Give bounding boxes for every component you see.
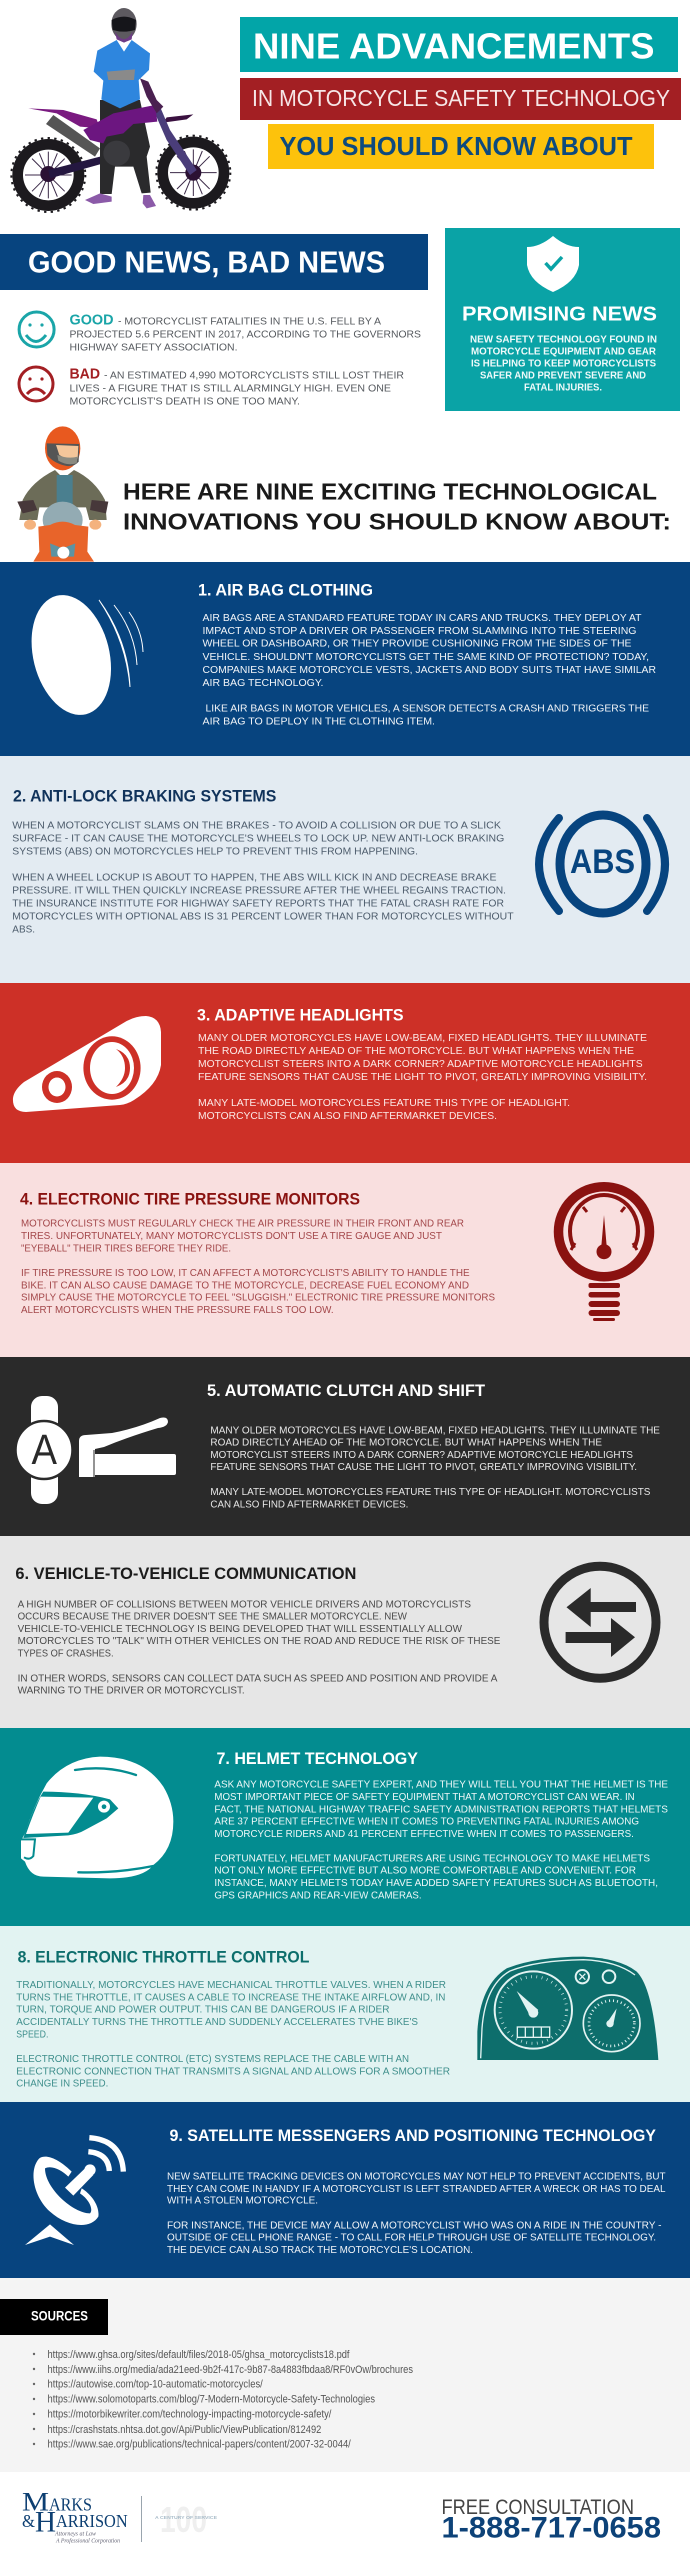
heading: 3 adaptive headlights: 3. ADAPTIVE HEADLIGHTS [197,1005,404,1024]
heading: good news, bad news: GOOD NEWS, BAD NEWS [28,246,385,280]
panel: 5 automatic clutch and shift [0,1357,690,1536]
text: satellite body: OUTSIDE OF CELL PHONE RANGE - TO CALL FOR HELP THROUGH USE OF SATELLITE TECHNOLOGY. [167,2233,656,2244]
text: bad news: - AN ESTIMATED 4,990 MOTORCYCLISTS STILL LOST THEIR [104,371,404,382]
text: clutch body: MOTORCYCLIST STEERS INTO A DARK CORNER? ADAPTIVE MOTORCYCLE HEADLIGHTS [210,1450,633,1461]
logo: Marks & Harrison: ARRISON [56,2511,128,2531]
title banner: nine advancements: NINE ADVANCEMENTS [253,26,654,67]
text: good news: HIGHWAY SAFETY ASSOCIATION. [70,342,238,353]
text: throttle body: CHANGE IN SPEED. [16,2079,108,2090]
text: air bag body: AIR BAG TO DEPLOY IN THE CLOTHING ITEM. [202,717,435,728]
title banner: nine advancements [240,17,678,72]
icon: clutch lever with A symbol: A [32,1426,57,1474]
text: air bag body [202,613,656,728]
panel: 3 adaptive headlights [0,983,690,1163]
logo: Marks & Harrison: A Professional Corporation [55,2537,120,2544]
icon: headlight [13,1016,161,1112]
text: anti-lock braking body: WHEN A MOTORCYCLIST SLAMS ON THE BRAKES - TO AVOID A COLLISION OR DUE TO A SLICK [12,821,501,832]
heading: 2 anti-lock braking systems: 2. ANTI-LOCK BRAKING SYSTEMS [13,787,276,806]
text: adaptive headlights body: MOTORCYCLISTS CAN ALSO FIND AFTERMARKET DEVICES. [198,1111,497,1122]
text: throttle body: TURNS THE THROTTLE, IT CAUSES A CABLE TO INCREASE THE INTAKE AIRFLOW AND, IN [16,1992,445,2003]
title banner: you should know about [268,124,654,169]
text: tire pressure body: ALERT MOTORCYCLISTS WHEN THE PRESSURE FALLS TOO LOW. [21,1305,334,1316]
text: throttle body [16,1980,450,2090]
text: satellite body: WITH A STOLEN MOTORCYCLE. [167,2196,318,2207]
icon: sad face [19,367,53,401]
title banner: in motorcycle safety technology [240,78,681,120]
text: tire pressure body: MOTORCYCLISTS MUST REGULARLY CHECK THE AIR PRESSURE IN THEIR FRONT AND REAR [21,1219,464,1230]
contact: free consultation phone number [442,2496,661,2545]
icon: two-way arrows [544,1566,656,1678]
logo: a century of service: A CENTURY OF SERVICE [155,2515,217,2520]
heading: 5 automatic clutch and shift: 5. AUTOMATIC CLUTCH AND SHIFT [207,1381,486,1400]
text: clutch body: MANY LATE-MODEL MOTORCYCLES FEATURE THIS TYPE OF HEADLIGHT. MOTORCYCLISTS [210,1487,651,1498]
heading: 1 air bag clothing: 1. AIR BAG CLOTHING [198,581,373,600]
text: bad news [70,367,404,408]
text: adaptive headlights body: MANY LATE-MODEL MOTORCYCLES FEATURE THIS TYPE OF HEADLIGHT. [198,1098,570,1109]
illustration: rider standing with dirt bike [11,8,230,212]
text: good news: PROJECTED 5.6 PERCENT IN 2017, ACCORDING TO THE GOVERNORS [70,329,421,340]
logo: Marks & Harrison: & [22,2511,35,2531]
heading: 7 helmet technology: 7. HELMET TECHNOLOGY [216,1749,419,1768]
icon: smiling face [19,312,54,347]
text: vehicle-to-vehicle body: TYPES OF CRASHES. [18,1648,114,1659]
text: promising news body: FATAL INJURIES. [524,382,602,393]
text: helmet body: GPS GRAPHICS AND REAR-VIEW CAMERAS. [214,1890,422,1901]
panel: 2 anti-lock braking systems [0,756,690,983]
text: throttle body: ELECTRONIC CONNECTION THAT TRANSMITS A SIGNAL AND ALLOWS FOR A SMOOTHER [16,2066,450,2077]
heading: 8 electronic throttle control: 8. ELECTRONIC THROTTLE CONTROL [18,1948,309,1967]
logo: Marks & Harrison [22,2488,142,2544]
text: throttle body: ELECTRONIC THROTTLE CONTROL (ETC) SYSTEMS REPLACE THE CABLE WITH AN [16,2054,409,2065]
text: helmet body [214,1780,668,1901]
heading: good news, bad news [0,234,428,290]
text: adaptive headlights body: MOTORCYCLIST STEERS INTO A DARK CORNER? ADAPTIVE MOTORCYCLE HEADLIGHTS [198,1059,643,1070]
text: bad news: LIVES - A FIGURE THAT IS STILL ALARMINGLY HIGH. EVEN ONE [70,384,391,395]
text: throttle body: ACCIDENTALLY TURNS THE THROTTLE AND SUDDENLY ACCELERATES TVHE BIKE'S [16,2017,418,2028]
icon: shield with check [527,236,579,292]
text: anti-lock braking body: ABS. [12,924,35,935]
text: satellite body: FOR INSTANCE, THE DEVICE MAY ALLOW A MOTORCYCLIST WHO WAS ON A RIDE IN THE COUNTRY - [167,2220,662,2231]
text: air bag body: AIR BAGS ARE A STANDARD FEATURE TODAY IN CARS AND TRUCKS. THEY DEPLOY AT [202,613,642,624]
text: helmet body: FACT, THE NATIONAL HIGHWAY TRAFFIC SAFETY ADMINISTRATION REPORTS THAT HELMETS [214,1804,668,1815]
text: helmet body: ARE 37 PERCENT EFFECTIVE WHEN IT COMES TO PREVENTING FATAL INJURIES AMONG [214,1817,639,1828]
text: vehicle-to-vehicle body: VEHICLE-TO-VEHICLE TECHNOLOGY IS BEING DEVELOPED THAT WILL ESSENTIALLY ALLOW [18,1624,462,1635]
text: bad news: BAD [70,367,100,383]
text: tire pressure body: BIKE. IT CAN ALSO CAUSE DAMAGE TO THE MOTORCYCLE, DECREASE FUEL ECONOMY AND [21,1280,469,1291]
text: vehicle-to-vehicle body: A HIGH NUMBER OF COLLISIONS BETWEEN MOTOR VEHICLE DRIVERS AND MOTORCYCLISTS [18,1599,471,1610]
text: throttle body: TURN, TORQUE AND POWER OUTPUT. THIS CAN BE DANGEROUS IF A RIDER [16,2005,390,2016]
text: anti-lock braking body: SURFACE - IT CAN CAUSE THE MOTORCYCLE'S WHEELS TO LOCK UP. NEW ANTI-LOCK BRAKING [12,834,504,845]
icon: ABS warning light [539,815,665,913]
text: promising news body [470,334,657,393]
panel: 8 electronic throttle control [0,1926,690,2102]
text: promising news body: IS HELPING TO KEEP MOTORCYCLISTS [471,358,656,369]
text: satellite body: THE DEVICE CAN ALSO TRACK THE MOTORCYCLE'S LOCATION. [167,2245,473,2256]
text: anti-lock braking body: WHEN A WHEEL LOCKUP IS ABOUT TO HAPPEN, THE ABS WILL KICK IN AND DECREASE BRAKE [12,872,497,883]
list: source links: https://crashstats.nhtsa.dot.gov/Api/Public/ViewPublication/812492 [48,2424,321,2436]
text: adaptive headlights body: FEATURE SENSORS THAT CAUSE THE LIGHT TO PIVOT, GREATLY IMPROVING VISIBILITY. [198,1072,647,1083]
text: satellite body: NEW SATELLITE TRACKING DEVICES ON MOTORCYCLES MAY NOT HELP TO PREVENT ACCIDENTS, BUT [167,2171,666,2182]
text: throttle body: SPEED. [16,2029,48,2040]
logo: Marks & Harrison: M [22,2488,49,2517]
text: air bag body: LIKE AIR BAGS IN MOTOR VEHICLES, A SENSOR DETECTS A CRASH AND TRIGGERS THE [206,704,649,715]
list: source links: https://www.ghsa.org/sites/default/files/2018-05/ghsa_motorcyclists18.pdf [48,2349,350,2361]
text: anti-lock braking body: THE INSURANCE INSTITUTE FOR HIGHWAY SAFETY REPORTS THAT THE FATAL CRASH RATE FOR [12,898,504,909]
text: air bag body: COMPANIES MAKE MOTORCYCLE VESTS, JACKETS AND BODY SUITS THAT HAVE SIMILAR [202,665,656,676]
panel: 7 helmet technology [0,1728,690,1926]
text: vehicle-to-vehicle body: MOTORCYCLES TO "TALK" WITH OTHER VEHICLES ON THE ROAD AND REDUCE THE RISK OF THESE [18,1636,501,1647]
text: air bag body: VEHICLE. SHOULDN'T MOTORCYCLISTS GET THE SAME KIND OF PROTECTION? TODAY, [202,652,649,663]
panel: 6 vehicle-to-vehicle communication [0,1536,690,1728]
text: clutch body: CAN ALSO FIND AFTERMARKET DEVICES. [210,1499,408,1510]
text: anti-lock braking body: PRESSURE. IT WILL THEN QUICKLY INCREASE PRESSURE AFTER THE WHEEL REGAINS TRACTION. [12,885,506,896]
panel: 4 electronic tire pressure monitors [0,1163,690,1357]
text: promising news body: SAFER AND PREVENT SEVERE AND [480,370,646,381]
text: clutch body: MANY OLDER MOTORCYCLES HAVE LOW-BEAM, FIXED HEADLIGHTS. THEY ILLUMINATE THE [210,1425,660,1436]
text: satellite body: THEY CAN COME IN HANDY IF A MOTORCYCLIST IS LEFT STRANDED AFTER A WRECK OR HAS TO DEAL [167,2184,666,2195]
panel: 1 air bag clothing [0,562,690,756]
text: promising news body: MOTORCYCLE EQUIPMENT AND GEAR [471,346,657,357]
text: clutch body: FEATURE SENSORS THAT CAUSE THE LIGHT TO PIVOT, GREATLY IMPROVING VISIBILITY. [210,1462,637,1473]
icon: helmet [21,1757,173,1878]
heading: sources: SOURCES [31,2309,88,2324]
list: source links: https://www.iihs.org/media/ada21eed-9b2f-417c-9b87-8a4883fbdaa8/RF0vOw/brochures [48,2364,413,2376]
text: adaptive headlights body: MANY OLDER MOTORCYCLES HAVE LOW-BEAM, FIXED HEADLIGHTS. THEY ILLUMINATE [198,1033,647,1044]
text: throttle body: TRADITIONALLY, MOTORCYCLES HAVE MECHANICAL THROTTLE VALVES. WHEN A RIDER [16,1980,446,1991]
text: tire pressure body: SIMPLY CAUSE THE MOTORCYCLE TO FEEL "SLUGGISH." ELECTRONIC TIRE PRESSURE MONITORS [21,1293,495,1304]
heading: promising news: PROMISING NEWS [462,304,657,326]
text: good news [70,312,421,353]
text: helmet body: INSTANCE, MANY HELMETS TODAY HAVE ADDED SAFETY FEATURES SUCH AS BLUETOOTH, [214,1878,658,1889]
text: clutch body: ROAD DIRECTLY AHEAD OF THE MOTORCYCLE. BUT WHAT HAPPENS WHEN THE [210,1438,602,1449]
text: helmet body: ASK ANY MOTORCYCLE SAFETY EXPERT, AND THEY WILL TELL YOU THAT THE HELMET IS THE [214,1780,668,1791]
text: vehicle-to-vehicle body: WARNING TO THE DRIVER OR MOTORCYCLIST. [18,1686,245,1697]
logo: Marks & Harrison: ARKS [49,2495,92,2515]
icon: air bag [20,587,143,723]
illustration: rider on orange motorcycle [17,426,108,562]
logo: Marks & Harrison: H [35,2506,56,2539]
heading: 9 satellite messengers and positioning technology: 9. SATELLITE MESSENGERS AND POSITIONING TECHNOLOGY [170,2126,657,2145]
icon: satellite dish [25,2138,123,2245]
text: anti-lock braking body: SYSTEMS (ABS) ON MOTORCYCLES HELP TO PREVENT THIS FROM HAPPENING. [12,847,418,858]
text: helmet body: MOST IMPORTANT PIECE OF SAFETY EQUIPMENT THAT A MOTORCYCLIST CAN WEAR. IN [214,1792,635,1803]
text: helmet body: MOTORCYCLE RIDERS AND 41 PERCENT EFFECTIVE WHEN IT COMES TO PASSENGERS. [214,1829,634,1840]
text: air bag body: IMPACT AND STOP A DRIVER OR PASSENGER FROM SLAMMING INTO THE STEERING [202,626,636,637]
text: helmet body: NOT ONLY MORE EFFECTIVE BUT ALSO MORE COMFORTABLE AND CONVENIENT. FOR [214,1866,636,1877]
heading: 4 electronic tire pressure monitors: 4. ELECTRONIC TIRE PRESSURE MONITORS [20,1189,360,1208]
heading: here are nine exciting technological innovations [123,478,671,534]
text: good news: - MOTORCYCLIST FATALITIES IN THE U.S. FELL BY A [118,316,381,327]
icon: motorcycle dashboard gauges [477,1957,658,2060]
panel: 9 satellite messengers and positioning technology [0,2102,690,2278]
icon: clutch lever with A symbol [16,1396,176,1504]
title banner: you should know about: YOU SHOULD KNOW ABOUT [280,133,633,161]
text: air bag body: AIR BAG TECHNOLOGY. [202,678,324,689]
panel: promising news [445,228,680,411]
contact: free consultation phone number: 1-888-717-0658 [442,2512,661,2545]
text: anti-lock braking body: MOTORCYCLES WITH OPTIONAL ABS IS 31 PERCENT LOWER THAN FOR MOTORCYCLES WITHOUT [12,911,514,922]
contact: free consultation phone number: FREE CONSULTATION [442,2496,634,2519]
heading: 6 vehicle-to-vehicle communication: 6. VEHICLE-TO-VEHICLE COMMUNICATION [15,1564,356,1583]
text: vehicle-to-vehicle body: IN OTHER WORDS, SENSORS CAN COLLECT DATA SUCH AS SPEED AND POSITION AND PROVIDE A [18,1673,498,1684]
panel: good news, bad news [0,234,428,408]
logo: Marks & Harrison: Attorneys at Law [54,2532,96,2538]
list: source links: https://autowise.com/top-10-automatic-motorcycles/ [48,2379,264,2391]
list: source links: https://www.solomotoparts.com/blog/7-Modern-Motorcycle-Safety-Technologies [48,2394,375,2406]
text: bad news: MOTORCYCLIST'S DEATH IS ONE TOO MANY. [70,397,300,408]
text: satellite body [167,2171,666,2256]
text: vehicle-to-vehicle body: OCCURS BECAUSE THE DRIVER DOESN'T SEE THE SMALLER MOTORCYCLE. NEW [18,1612,407,1623]
text: anti-lock braking body [12,821,514,935]
text: good news: GOOD [70,312,114,328]
text: vehicle-to-vehicle body [18,1599,501,1697]
heading: sources [0,2299,108,2335]
text: promising news body: NEW SAFETY TECHNOLOGY FOUND IN [470,334,657,345]
heading: here are nine exciting technological innovations: INNOVATIONS YOU SHOULD KNOW ABOUT: [123,508,671,534]
text: adaptive headlights body: THE ROAD DIRECTLY AHEAD OF THE MOTORCYCLE. BUT WHAT HAPPENS WHEN THE [198,1046,634,1057]
text: tire pressure body: "EYEBALL" THEIR TIRES BEFORE THEY RIDE. [21,1243,231,1254]
text: air bag body: WHEEL OR DASHBOARD, OR THEY PROVIDE CUSHIONING FROM THE SIDES OF THE [202,639,632,650]
text: clutch body [210,1425,660,1510]
list: source links [33,2349,413,2450]
list: source links: https://www.sae.org/publications/technical-papers/content/2007-32-0044/ [48,2438,352,2450]
text: tire pressure body: TIRES. UNFORTUNATELY, MANY MOTORCYCLISTS DON'T USE A TIRE GAUGE AND JUST [21,1231,443,1242]
text: helmet body: FORTUNATELY, HELMET MANUFACTURERS ARE USING TECHNOLOGY TO MAKE HELMETS [214,1853,650,1864]
list: source links: https://motorbikewriter.com/technology-impacting-motorcycle-safety/ [48,2409,332,2421]
panel: sources [0,2278,690,2472]
icon: ABS warning light: ABS [570,843,635,881]
text: tire pressure body [21,1219,495,1316]
heading: here are nine exciting technological innovations: HERE ARE NINE EXCITING TECHNOLOGICAL [123,478,657,504]
icon: pressure gauge [558,1187,650,1321]
logo: a century of service: 100 [160,2499,207,2540]
text: tire pressure body: IF TIRE PRESSURE IS TOO LOW, IT CAN AFFECT A MOTORCYCLIST'S ABILITY TO HANDLE THE [21,1268,470,1279]
text: adaptive headlights body [198,1033,647,1122]
